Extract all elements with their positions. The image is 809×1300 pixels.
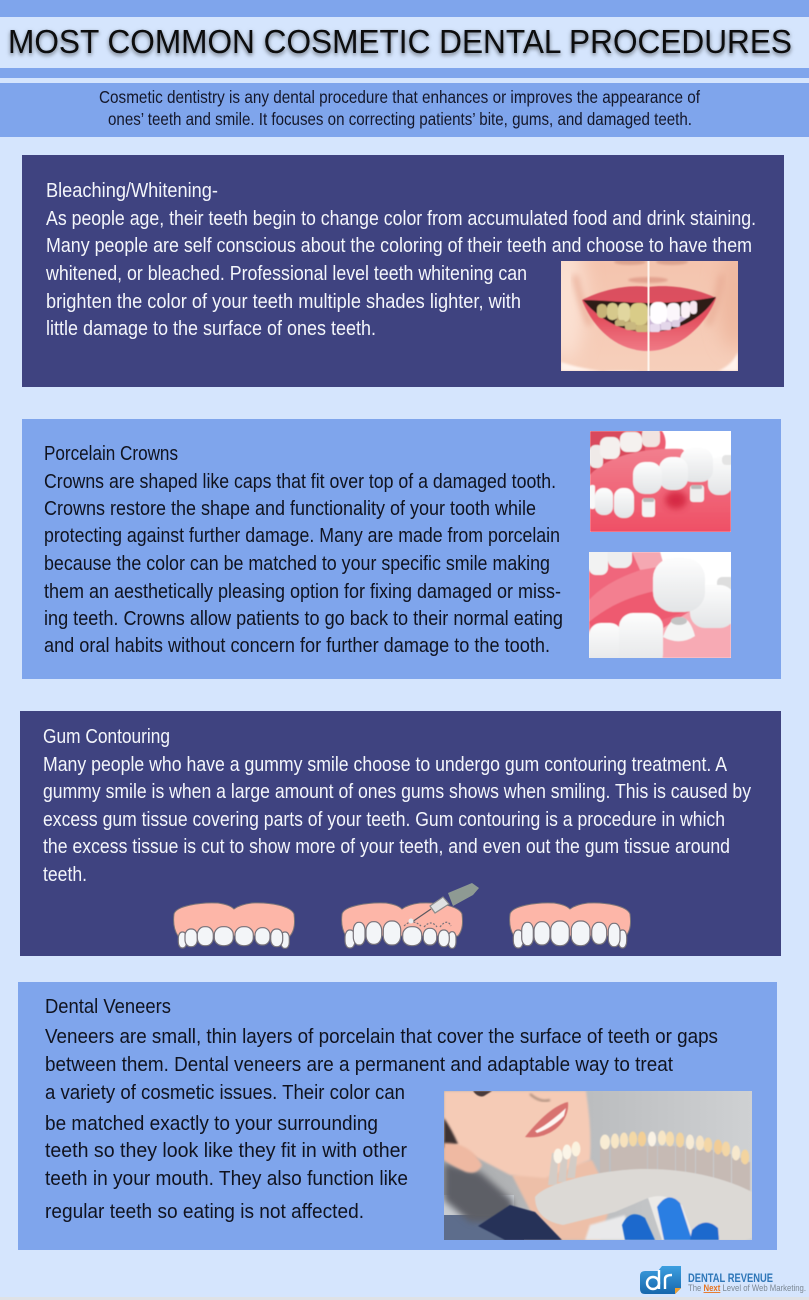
text block: crowns: protecting against further damage. Many are made from porcelain [44, 524, 560, 547]
image: dental bridge [590, 428, 734, 532]
diagram: gum after treatment [510, 903, 631, 948]
text block: whitening: brighten the color of your teeth multiple shades lighter, with [46, 290, 521, 313]
text block: whitening: little damage to the surface of ones teeth. [46, 317, 376, 340]
brand name: DENTAL REVENUE [688, 1273, 773, 1285]
icon: dr mark [640, 1266, 681, 1294]
text block: veneers: teeth so they look like they fit in with other [45, 1139, 407, 1162]
text block: gum contouring: Gum Contouring [43, 725, 170, 748]
panel: gum contouring [20, 711, 781, 956]
image: before and after smile [561, 261, 738, 371]
diagram: gum being contoured with laser tool [342, 883, 479, 948]
intro band [0, 83, 809, 137]
text block: crowns: ing teeth. Crowns allow patients to go back to their normal eating [44, 607, 563, 630]
diagram: gum before treatment [174, 903, 295, 948]
text block: veneers: be matched exactly to your surrounding [45, 1112, 378, 1135]
text block: veneers: a variety of cosmetic issues. Their color can [45, 1081, 405, 1104]
image: shade guide at patient's smile [444, 1091, 752, 1240]
text block: gum contouring: teeth. [43, 863, 87, 886]
panel: bleaching and whitening [22, 155, 784, 387]
text block: whitening [45, 179, 756, 340]
intro text: ones’ teeth and smile. It focuses on correcting patients’ bite, gums, and damaged teeth. [108, 109, 692, 129]
text block: whitening: whitened, or bleached. Professional level teeth whitening can [45, 262, 527, 285]
text block: crowns: because the color can be matched to your specific smile making [44, 552, 550, 575]
text block: crowns [44, 442, 563, 657]
panel: dental veneers [18, 982, 777, 1250]
title: MOST COMMON COSMETIC DENTAL PROCEDURES [8, 23, 792, 60]
text block: crowns: Crowns restore the shape and functionality of your tooth while [44, 497, 536, 520]
text block: veneers [45, 995, 718, 1223]
text block: gum contouring [43, 725, 752, 886]
intro text [99, 87, 700, 129]
image: crown over tooth [589, 552, 731, 658]
logo: Dental Revenue [640, 1266, 806, 1294]
text block: veneers: regular teeth so eating is not affected. [45, 1200, 364, 1223]
text block: crowns: them an aesthetically pleasing option for fixing damaged or miss- [44, 580, 561, 603]
text block: veneers: Dental Veneers [45, 995, 171, 1018]
text block: whitening: Bleaching/Whitening- [46, 179, 218, 202]
text block: veneers: between them. Dental veneers are a permanent and adaptable way to treat [45, 1053, 673, 1076]
intro text: Cosmetic dentistry is any dental procedure that enhances or improves the appearance of [99, 87, 700, 107]
text block: crowns: Porcelain Crowns [44, 442, 178, 465]
panel: porcelain crowns [22, 419, 781, 679]
text block: crowns: Crowns are shaped like caps that fit over top of a damaged tooth. [44, 470, 556, 493]
text block: crowns: and oral habits without concern for further damage to the tooth. [44, 634, 550, 657]
text block: veneers: Veneers are small, thin layers of porcelain that cover the surface of teeth or gaps [45, 1025, 718, 1048]
text block: veneers: teeth in your mouth. They also function like [45, 1167, 408, 1190]
header band with title [0, 0, 809, 78]
